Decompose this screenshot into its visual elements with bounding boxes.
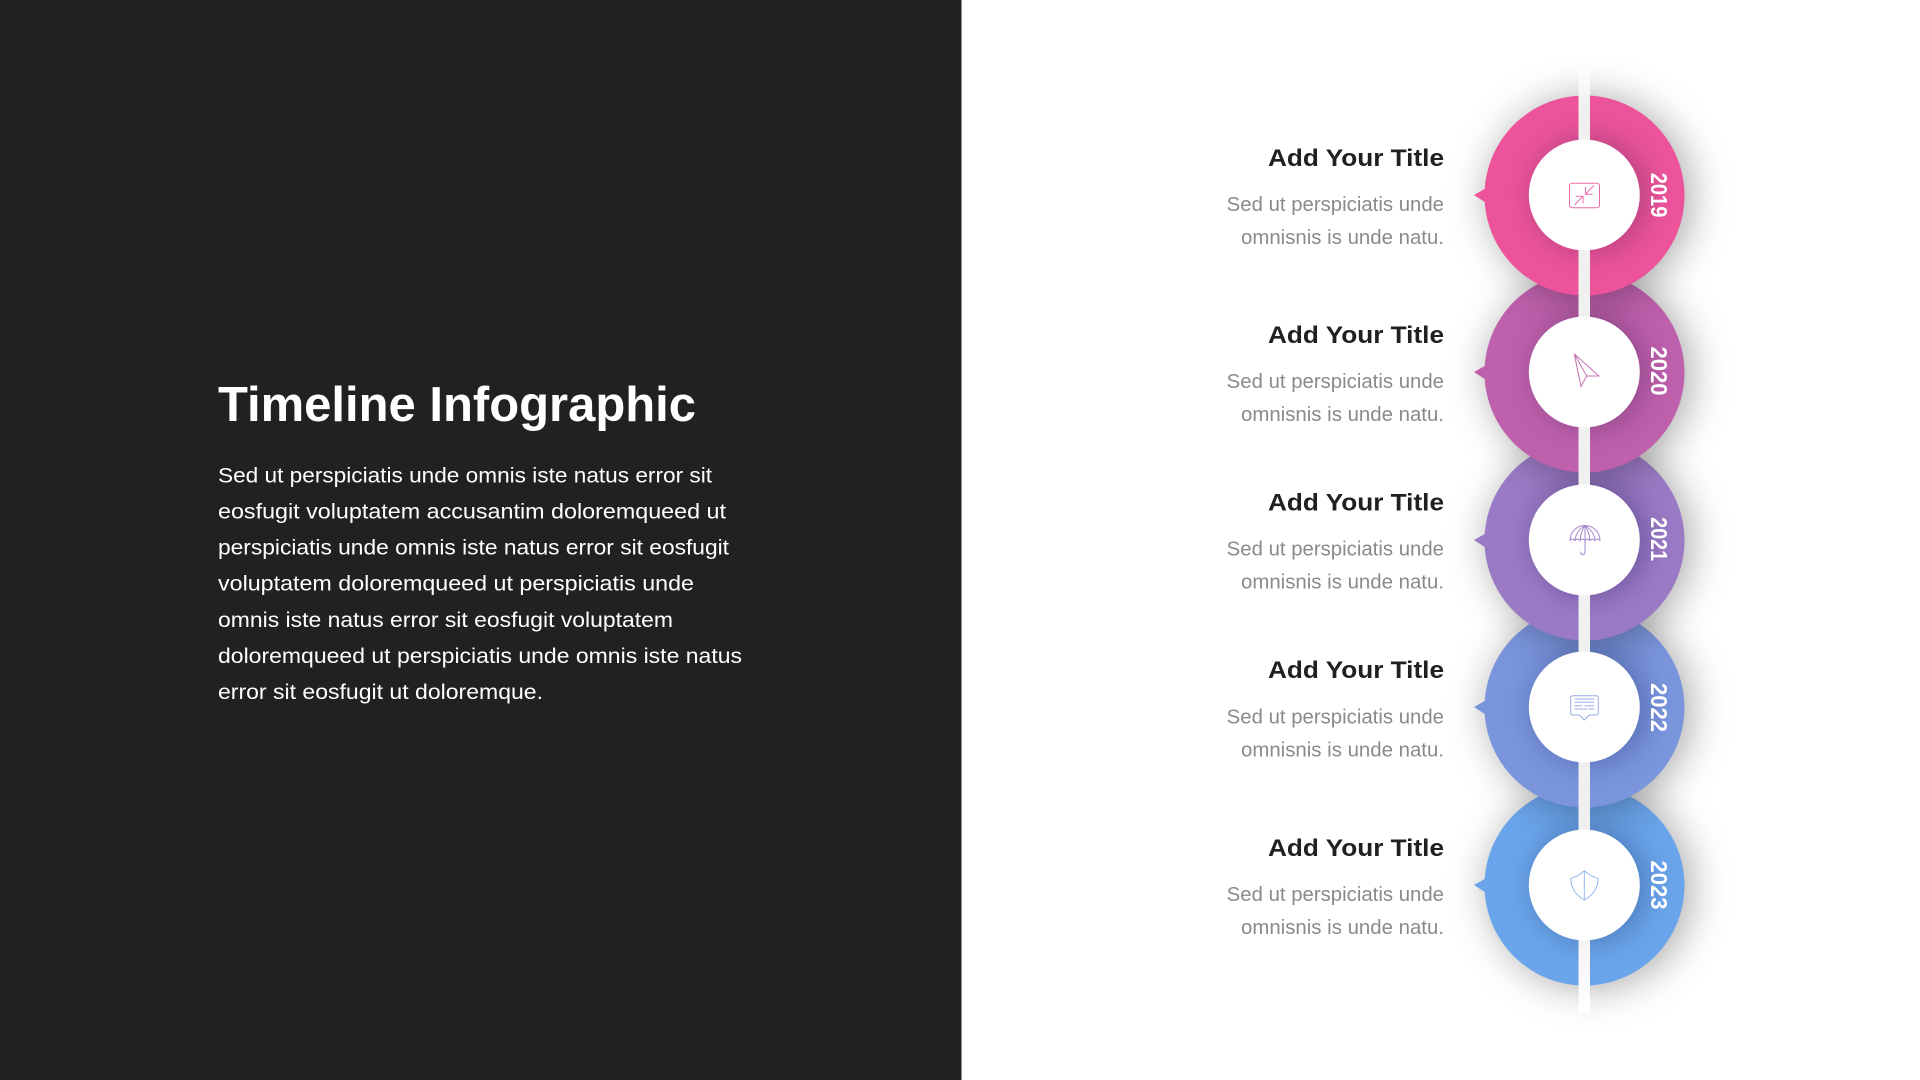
text block: 2023: Add Your Title (1268, 835, 1444, 862)
year labels: 2022 (1646, 683, 1672, 732)
year labels: 2021 (1646, 517, 1672, 561)
text block: 2023: Sed ut perspiciatis unde (1227, 884, 1444, 906)
step 2023: icon disc (1529, 830, 1640, 940)
text block: 2022: Add Your Title (1268, 657, 1444, 684)
year labels: 2019 (1646, 173, 1672, 217)
body paragraph: voluptatem doloremqueed ut perspiciatis unde (218, 572, 694, 596)
body paragraph: error sit eosfugit ut doloremque. (218, 681, 543, 704)
text block: 2022 (1227, 657, 1444, 762)
year labels (1646, 173, 1672, 909)
text block: 2021 (1227, 490, 1444, 594)
body paragraph: perspiciatis unde omnis iste natus error sit eosfugit (218, 536, 729, 560)
text block: 2020 (1227, 322, 1444, 426)
icon: paper plane (1574, 354, 1599, 387)
step 2020: icon disc (1529, 316, 1640, 428)
text block: 2019 (1227, 145, 1444, 249)
body paragraph (218, 464, 742, 704)
ring: 2019 pink (1474, 95, 1684, 296)
text block: 2022: Sed ut perspiciatis unde (1227, 706, 1444, 728)
text block: 2023: omnisnis is unde natu. (1241, 917, 1444, 939)
text block: 2021: Sed ut perspiciatis unde (1227, 538, 1444, 560)
body paragraph: omnis iste natus error sit eosfugit voluptatem (218, 609, 673, 632)
icon: speech bubble (1571, 696, 1598, 720)
step 2019: icon disc (1529, 140, 1640, 250)
ring: 2023 blue (1474, 785, 1684, 986)
text block: 2020: Add Your Title (1268, 322, 1444, 349)
panel: intro text (218, 378, 742, 704)
body paragraph: Sed ut perspiciatis unde omnis iste natus error sit (218, 464, 712, 488)
step 2021: icon disc (1529, 484, 1640, 596)
year labels: 2020 (1646, 346, 1672, 396)
text block: 2022: omnisnis is unde natu. (1241, 740, 1444, 762)
year labels: 2023 (1646, 860, 1672, 910)
body paragraph: doloremqueed ut perspiciatis unde omnis iste natus (218, 645, 742, 668)
panel: dark left background (0, 0, 962, 1080)
ring: 2020 mauve (1474, 273, 1684, 472)
text block: 2019: Sed ut perspiciatis unde (1227, 194, 1444, 216)
vertical timeline strip (1578, 68, 1590, 1012)
text block: 2023 (1227, 835, 1444, 939)
text block: 2019: Add Your Title (1268, 145, 1444, 172)
text block: 2020: omnisnis is unde natu. (1241, 404, 1444, 426)
text block: 2020: Sed ut perspiciatis unde (1227, 371, 1444, 393)
icon: umbrella (1570, 526, 1600, 554)
text block: 2021: Add Your Title (1268, 490, 1444, 516)
step 2022: icon disc (1529, 652, 1640, 762)
ring: 2021 purple (1474, 440, 1684, 640)
text block: 2019: omnisnis is unde natu. (1241, 227, 1444, 249)
title: Timeline Infographic (218, 378, 696, 432)
icon: shield (1571, 871, 1598, 900)
icon: compress arrows (1570, 183, 1600, 208)
body paragraph: eosfugit voluptatem accusantim doloremqueed ut (218, 500, 726, 524)
ring: 2022 periwinkle (1474, 608, 1684, 808)
text block: 2021: omnisnis is unde natu. (1241, 572, 1444, 594)
